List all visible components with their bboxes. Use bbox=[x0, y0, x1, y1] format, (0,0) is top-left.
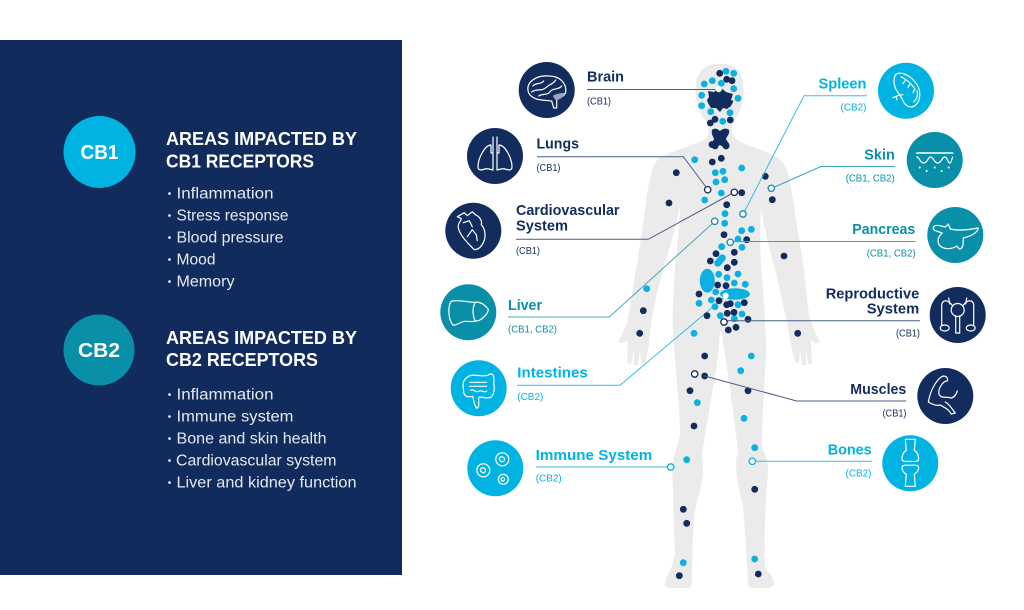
label: Skin: Skin bbox=[864, 146, 895, 163]
list: CB1 areas: Stress response bbox=[176, 207, 288, 224]
icon: heart bbox=[445, 203, 501, 259]
heading: CB1 areas bbox=[166, 129, 357, 171]
label: Intestines: Intestines bbox=[517, 365, 588, 382]
heading: CB1 areas: CB1 RECEPTORS bbox=[166, 151, 314, 171]
icon: pancreas bbox=[927, 207, 983, 263]
receptor dots: CB2 cyan bbox=[643, 68, 758, 566]
receptor dots: CB1 navy bbox=[636, 70, 801, 579]
icon: reproductive system bbox=[930, 287, 986, 343]
label: Spleen: Spleen bbox=[818, 75, 866, 92]
label: Lungs bbox=[467, 128, 711, 193]
label: Intestines: (CB2) bbox=[517, 391, 543, 403]
body silhouette bbox=[618, 64, 820, 588]
label: Skin: (CB1, CB2) bbox=[846, 173, 895, 185]
label: Pancreas: Pancreas bbox=[852, 221, 915, 238]
icon: spleen bbox=[878, 63, 934, 119]
icon: immune cells bbox=[467, 440, 523, 496]
icon: lungs bbox=[467, 128, 523, 184]
label: Lungs: (CB1) bbox=[536, 162, 560, 174]
heading: CB1 areas: AREAS IMPACTED BY bbox=[166, 129, 357, 149]
badge: CB2 bbox=[64, 314, 134, 386]
label: Muscles: Muscles bbox=[850, 381, 906, 398]
label: Liver: Liver bbox=[508, 297, 542, 314]
label: Bones: Bones bbox=[828, 441, 872, 458]
list: CB2 areas bbox=[168, 386, 356, 491]
label: Cardiovascular System: System bbox=[516, 217, 568, 234]
label: Immune System: (CB2) bbox=[536, 473, 562, 485]
label: Lungs: Lungs bbox=[536, 135, 579, 152]
label: Muscles bbox=[692, 368, 973, 424]
label: Bones: (CB2) bbox=[846, 467, 872, 479]
list: CB2 areas: Liver and kidney function bbox=[176, 474, 356, 491]
list: CB1 areas: Memory bbox=[176, 273, 235, 290]
label: Pancreas: (CB1, CB2) bbox=[867, 247, 916, 259]
label: Cardiovascular System bbox=[445, 189, 738, 259]
label: Immune System: Immune System bbox=[536, 447, 652, 464]
heading: CB2 areas bbox=[166, 328, 357, 370]
label: Liver: (CB1, CB2) bbox=[508, 323, 557, 335]
icon: liver bbox=[440, 284, 496, 340]
icon: skin bbox=[907, 132, 963, 188]
label: Brain: (CB1) bbox=[587, 95, 611, 107]
list: CB1 areas: Inflammation bbox=[176, 185, 274, 202]
icon: muscle arm bbox=[917, 368, 973, 424]
label: Reproductive System bbox=[721, 285, 986, 343]
label: Reproductive System: (CB1) bbox=[896, 327, 920, 339]
label: Liver bbox=[440, 218, 718, 340]
label: Intestines bbox=[451, 293, 729, 416]
label: Muscles: (CB1) bbox=[882, 407, 906, 419]
label: Cardiovascular System: Cardiovascular bbox=[516, 202, 620, 219]
label: Brain: Brain bbox=[587, 69, 624, 86]
list: CB2 areas: Inflammation bbox=[176, 386, 274, 403]
list: CB1 areas: Mood bbox=[176, 251, 216, 268]
icon: intestines bbox=[451, 360, 507, 416]
list: CB1 areas bbox=[168, 185, 288, 290]
label: Reproductive System: Reproductive bbox=[826, 285, 919, 302]
list: CB2 areas: Bone and skin health bbox=[176, 430, 326, 447]
list: CB1 areas: Blood pressure bbox=[176, 229, 284, 246]
label: Spleen bbox=[740, 63, 934, 217]
label: Brain bbox=[519, 62, 722, 118]
heading: CB2 areas: CB2 RECEPTORS bbox=[166, 350, 318, 370]
label: Immune System bbox=[467, 440, 674, 496]
badge: CB1 bbox=[64, 116, 136, 188]
badge: CB1: CB1 bbox=[80, 142, 118, 164]
label: Cardiovascular System: (CB1) bbox=[516, 245, 540, 257]
badge: CB2: CB2 bbox=[78, 340, 120, 362]
label: Bones bbox=[749, 435, 938, 491]
label: Reproductive System: System bbox=[867, 301, 919, 318]
list: CB2 areas: Cardiovascular system bbox=[176, 452, 336, 469]
label: Skin bbox=[768, 132, 963, 192]
icon: brain bbox=[519, 62, 575, 118]
label: Spleen: (CB2) bbox=[840, 102, 866, 114]
label: Pancreas bbox=[727, 207, 983, 263]
panel: receptor summary bbox=[0, 40, 402, 575]
list: CB2 areas: Immune system bbox=[176, 408, 294, 425]
icon: knee joint bbox=[882, 435, 938, 491]
connector: Intestines line bbox=[517, 298, 724, 385]
heading: CB2 areas: AREAS IMPACTED BY bbox=[166, 328, 357, 348]
